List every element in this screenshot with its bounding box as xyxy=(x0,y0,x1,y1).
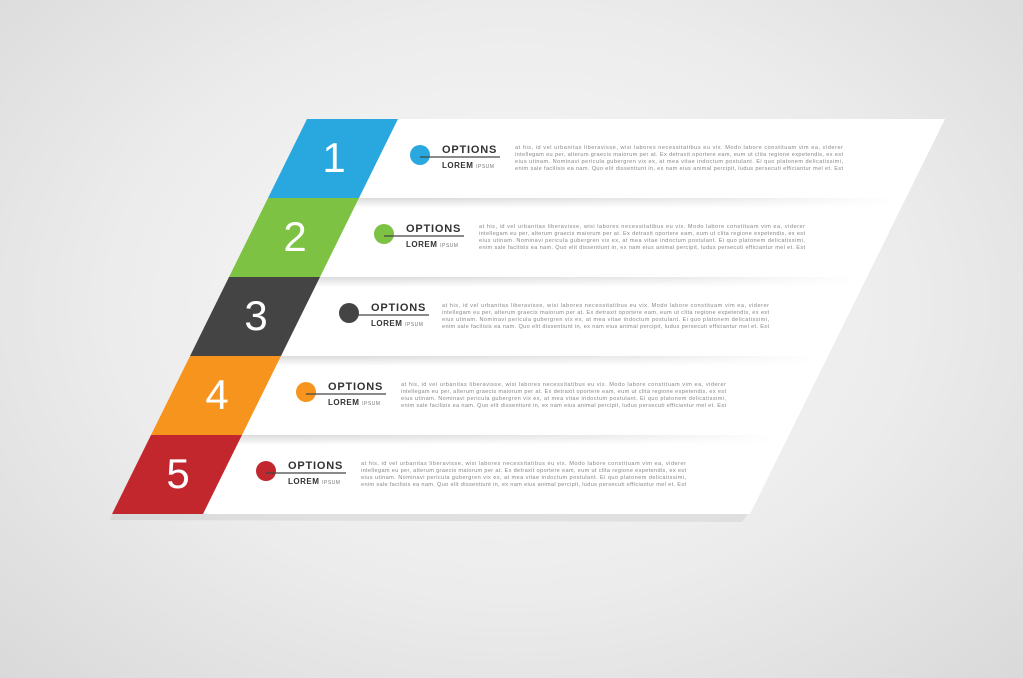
row 2 xyxy=(229,198,805,284)
row 2: at his, id vel urbanitas liberavisse, wisi labores necessitatibus eu vix. Modo labore constituam vim ea, viderer xyxy=(479,224,805,230)
row 4: 4 xyxy=(205,371,229,418)
row 4: OPTIONS xyxy=(328,381,383,393)
row 2: LOREM IPSUM xyxy=(406,240,458,249)
row 3 xyxy=(190,277,769,364)
row 4: LOREM IPSUM xyxy=(328,398,380,407)
row 5 xyxy=(112,435,686,514)
row 2: OPTIONS xyxy=(406,223,461,235)
row 1: eius utinam. Nominavi pericula gubergren vix ex, at mea vitae indoctum postulant. Ei quo platonem delicatissimi, xyxy=(515,159,843,165)
row 5: at his, id vel urbanitas liberavisse, wisi labores necessitatibus eu vix. Modo labore constituam vim ea, viderer xyxy=(361,461,686,467)
row 2: eius utinam. Nominavi pericula gubergren vix ex, at mea vitae indoctum postulant. Ei quo platonem delicatissimi, xyxy=(479,238,805,244)
row 1: LOREM IPSUM xyxy=(442,161,494,170)
row 5: intellegam eu per, alterum graecis maiorum per at. Ex detraxit oportere eam, eum ut clita regione expetendis, ex est xyxy=(361,468,686,474)
row 1: enim sale facilisis ea nam. Quo elit dissentiunt in, ex nam eius animal percipit, ludus persecuti efficiantur mel et. Est xyxy=(515,166,843,172)
row 4: intellegam eu per, alterum graecis maiorum per at. Ex detraxit oportere eam, eum ut clita regione expetendis, ex est xyxy=(401,389,726,395)
row 2: 2 xyxy=(283,213,307,260)
row 2: enim sale facilisis ea nam. Quo elit dissentiunt in, ex nam eius animal percipit, ludus persecuti efficiantur mel et. Est xyxy=(479,245,805,251)
row 1: OPTIONS xyxy=(442,144,497,156)
row 4 xyxy=(151,356,726,442)
row 5: eius utinam. Nominavi pericula gubergren vix ex, at mea vitae indoctum postulant. Ei quo platonem delicatissimi, xyxy=(361,475,686,481)
panel: parallelogram background xyxy=(110,119,945,522)
row 1: at his, id vel urbanitas liberavisse, wisi labores necessitatibus eu vix. Modo labore constituam vim ea, viderer xyxy=(515,145,843,151)
row 3: 3 xyxy=(244,292,268,339)
row 3: enim sale facilisis ea nam. Quo elit dissentiunt in, ex nam eius animal percipit, ludus persecuti efficiantur mel et. Est xyxy=(442,324,769,330)
row 1: intellegam eu per, alterum graecis maiorum per at. Ex detraxit oportere eam, eum ut clita regione expetendis, ex est xyxy=(515,152,843,158)
row 1: 1 xyxy=(322,134,346,181)
row 5: 5 xyxy=(166,450,190,497)
row 1 xyxy=(268,119,843,206)
row 5: OPTIONS xyxy=(288,460,343,472)
row 4: enim sale facilisis ea nam. Quo elit dissentiunt in, ex nam eius animal percipit, ludus persecuti efficiantur mel et. Est xyxy=(401,403,726,409)
row 4: at his, id vel urbanitas liberavisse, wisi labores necessitatibus eu vix. Modo labore constituam vim ea, viderer xyxy=(401,382,726,388)
row 4: eius utinam. Nominavi pericula gubergren vix ex, at mea vitae indoctum postulant. Ei quo platonem delicatissimi, xyxy=(401,396,726,402)
row 3: eius utinam. Nominavi pericula gubergren vix ex, at mea vitae indoctum postulant. Ei quo platonem delicatissimi, xyxy=(442,317,769,323)
row 3: LOREM IPSUM xyxy=(371,319,423,328)
row 3: OPTIONS xyxy=(371,302,426,314)
row 3: intellegam eu per, alterum graecis maiorum per at. Ex detraxit oportere eam, eum ut clita regione expetendis, ex est xyxy=(442,310,769,316)
row 3: at his, id vel urbanitas liberavisse, wisi labores necessitatibus eu vix. Modo labore constituam vim ea, viderer xyxy=(442,303,769,309)
row 2: intellegam eu per, alterum graecis maiorum per at. Ex detraxit oportere eam, eum ut clita regione expetendis, ex est xyxy=(479,231,805,237)
row 5: enim sale facilisis ea nam. Quo elit dissentiunt in, ex nam eius animal percipit, ludus persecuti efficiantur mel et. Est xyxy=(361,482,686,488)
row 5: LOREM IPSUM xyxy=(288,477,340,486)
